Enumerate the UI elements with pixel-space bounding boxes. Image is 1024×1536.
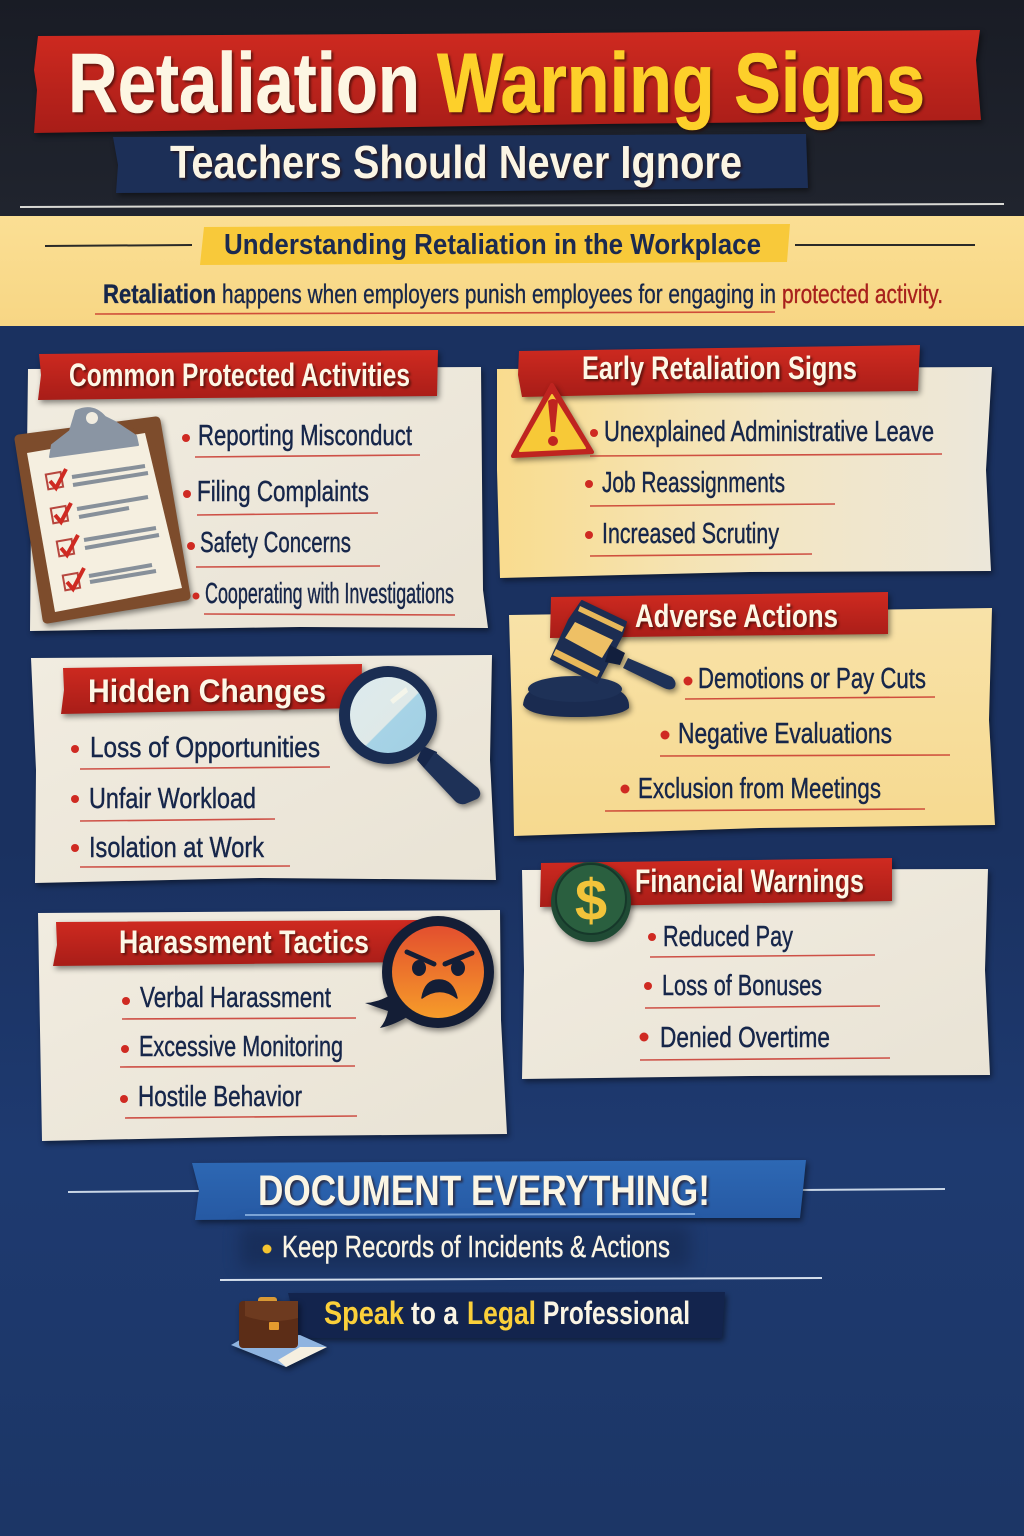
header: hidden changes [61,664,362,714]
icon: clipboard [19,408,186,619]
list item: Cooperating with Investigations [192,578,455,615]
icon: dollar coin: $ [575,868,607,933]
intro sentence: happens when employers punish employees for engaging in [222,279,776,309]
header: common protected activities: Common Protected Activities [69,357,410,393]
intro band [0,216,1024,326]
list item: Reduced Pay [648,921,875,957]
panel: early retaliation signs [497,345,992,578]
list item: Negative Evaluations: Negative Evaluations [678,718,892,750]
panel: financial warnings [522,858,990,1079]
list item: Demotions or Pay Cuts [684,663,935,699]
subtitle text: Teachers Should Never Ignore [170,136,742,188]
intro heading: Understanding Retaliation in the Workplace [224,229,761,261]
band: speak to a legal professional [288,1292,725,1338]
band: keep records [240,1226,690,1268]
callout: document everything [68,1160,945,1220]
header: financial warnings [540,858,892,907]
icon: dollar coin [551,862,631,942]
text: speak to a legal professional: Professional [543,1295,690,1331]
text: speak to a legal professional: Speak [324,1295,404,1331]
header: common protected activities [38,350,438,400]
list item: Safety Concerns [187,527,380,567]
panel: adverse actions [509,592,995,836]
intro sentence: protected activity. [782,279,943,309]
header: adverse actions: Adverse Actions [635,598,838,634]
list item: Reporting Misconduct [182,420,420,457]
list item: Denied Overtime: Denied Overtime [660,1022,830,1054]
list item: Filing Complaints: Filing Complaints [197,476,369,508]
panel: harassment tactics [38,910,507,1141]
list item: Loss of Bonuses: Loss of Bonuses [662,970,822,1002]
header: financial warnings: Financial Warnings [635,863,864,899]
header: adverse actions [550,592,888,638]
list item: Unfair Workload: Unfair Workload [89,783,256,815]
list item: Safety Concerns: Safety Concerns [200,527,351,559]
header: hidden changes: Hidden Changes [88,673,326,709]
list item: Excessive Monitoring: Excessive Monitoring [139,1031,343,1063]
header: harassment tactics: Harassment Tactics [119,924,369,960]
list item: Hostile Behavior: Hostile Behavior [138,1081,302,1113]
panel: hidden changes [31,655,496,883]
icon: magnifying glass [339,666,480,804]
background: dark header [0,0,1024,216]
list item: Excessive Monitoring [120,1031,355,1067]
icon: gavel [523,601,676,717]
subtitle banner [113,134,808,193]
list item: Filing Complaints [183,476,378,515]
list item: Exclusion from Meetings: Exclusion from Meetings [638,773,881,805]
text: speak to a legal professional: to a [411,1295,458,1331]
intro sentence: Retaliation [103,279,216,309]
list item: Isolation at Work: Isolation at Work [89,832,264,864]
callout heading: DOCUMENT EVERYTHING! [258,1167,710,1215]
title text: Warning Signs [437,36,925,130]
icon: angry face [365,916,494,1028]
list item: Reporting Misconduct: Reporting Misconduct [198,420,412,452]
list item: Verbal Harassment: Verbal Harassment [140,982,331,1014]
icon: warning triangle [513,385,592,456]
text: speak to a legal professional: Legal [467,1295,536,1331]
icon: briefcase on papers [231,1297,327,1367]
title banner [34,30,981,133]
list item: Demotions or Pay Cuts: Demotions or Pay Cuts [698,663,926,695]
panel: common protected activities [19,350,488,631]
header: early retaliation signs [518,345,920,397]
header: harassment tactics [53,920,420,966]
list item: Increased Scrutiny: Increased Scrutiny [602,518,779,550]
list item: Cooperating with Investigations: Cooperating with Investigations [205,578,454,610]
list item: Reduced Pay: Reduced Pay [663,921,793,953]
title text: Retaliation [68,36,420,130]
header: early retaliation signs: Early Retaliation Signs [582,350,857,386]
list item: Job Reassignments: Job Reassignments [602,467,785,499]
list item: Unexplained Administrative Leave [590,416,942,456]
list item: Loss of Opportunities: Loss of Opportunities [90,732,320,764]
text: keep records: Keep Records of Incidents & Actions [282,1229,670,1264]
